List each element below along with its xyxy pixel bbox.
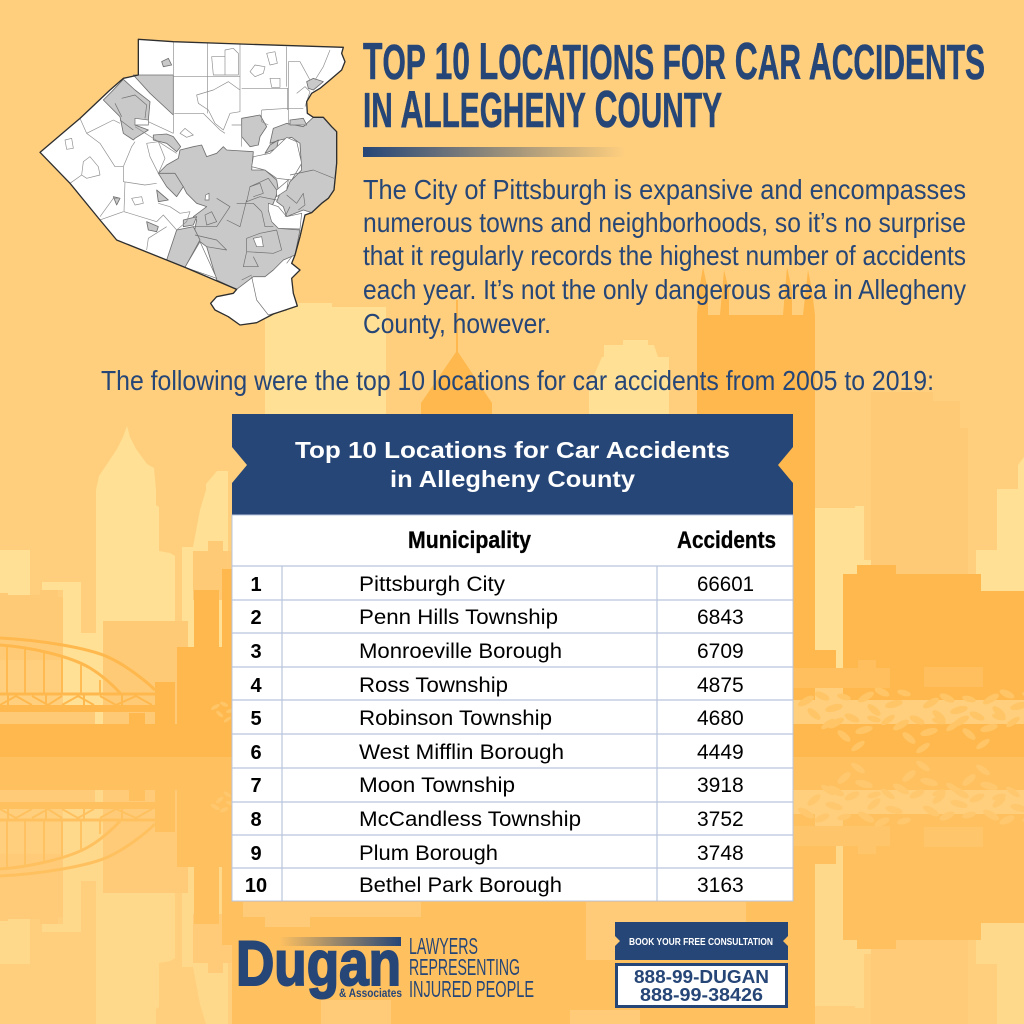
rank column: 10 xyxy=(245,875,267,897)
rank column: 6 xyxy=(250,742,262,764)
call to action banner: BOOK YOUR FREE CONSULTATION xyxy=(629,936,773,948)
accidents column: 3163 xyxy=(697,874,744,897)
rank column: 3 xyxy=(250,641,262,663)
accidents column: 66601 xyxy=(697,573,754,596)
intro paragraph: County, however. xyxy=(363,308,551,339)
table panel xyxy=(232,414,793,901)
municipality column xyxy=(359,573,581,897)
table banner: Top 10 Locations for Car Accidents xyxy=(295,437,730,463)
phone number box: 888-99-DUGAN xyxy=(634,966,769,987)
table body xyxy=(232,515,793,901)
reflection light patches below the table xyxy=(243,902,746,1024)
intro paragraph: numerous towns and neighborhoods, so it’s no surprise xyxy=(363,207,966,238)
municipality column: Robinson Township xyxy=(359,707,552,730)
firm tagline: REPRESENTING xyxy=(409,954,520,980)
title divider gradient bar xyxy=(363,147,625,157)
rank column: 2 xyxy=(250,607,262,629)
intro paragraph xyxy=(363,174,966,339)
skyline reflection in river xyxy=(0,757,1024,1024)
main title xyxy=(363,33,985,139)
accidents column: 3752 xyxy=(697,808,744,831)
table header row xyxy=(408,527,776,554)
bridge xyxy=(0,638,155,708)
municipality column: Bethel Park Borough xyxy=(359,874,562,897)
accidents column: 6709 xyxy=(697,640,744,663)
accidents column: 4680 xyxy=(697,707,744,730)
leaves xyxy=(210,685,1024,755)
table header row: Accidents xyxy=(677,527,776,554)
river bank band xyxy=(0,724,1024,757)
municipality column: Ross Township xyxy=(359,674,508,697)
intro paragraph: each year. It’s not the only dangerous area in Allegheny xyxy=(363,274,966,305)
table banner: in Allegheny County xyxy=(390,466,635,492)
rank column: 9 xyxy=(250,843,262,865)
table header row: Municipality xyxy=(408,527,532,554)
municipality column: Moon Township xyxy=(359,774,515,797)
firm tagline: INJURED PEOPLE xyxy=(409,976,534,1002)
highlighted municipalities xyxy=(103,58,337,289)
municipality column: Monroeville Borough xyxy=(359,640,562,663)
municipality column: McCandless Township xyxy=(359,808,581,831)
accidents column: 6843 xyxy=(697,606,744,629)
rank column: 4 xyxy=(250,675,262,697)
intro paragraph: that it regularly records the highest number of accidents xyxy=(363,240,966,271)
consultation call to action xyxy=(615,922,788,1006)
upper skyline silhouettes xyxy=(96,267,1024,490)
phone number box: 888-99-38426 xyxy=(640,984,763,1005)
firm tagline: LAWYERS xyxy=(409,933,478,959)
accidents column: 4875 xyxy=(697,674,744,697)
municipal boundaries xyxy=(65,42,330,250)
rank column: 7 xyxy=(250,775,262,797)
accidents column: 3748 xyxy=(697,842,744,865)
firm tagline xyxy=(409,933,534,1002)
intro paragraph: The City of Pittsburgh is expansive and encompasses xyxy=(363,174,966,205)
main title: IN ALLEGHENY COUNTY xyxy=(363,81,722,139)
locator map of Allegheny County xyxy=(40,39,345,325)
table lead-in sentence: The following were the top 10 locations for car accidents from 2005 to 2019: xyxy=(101,365,934,396)
white enclaves xyxy=(135,118,302,278)
municipality column: Penn Hills Township xyxy=(359,606,558,629)
boundaries inside highlighted area xyxy=(115,95,334,315)
rank column: 8 xyxy=(250,809,262,831)
call to action banner xyxy=(615,922,788,960)
Dugan logo: Dugan xyxy=(236,929,401,999)
rank column: 1 xyxy=(250,574,262,596)
county border xyxy=(40,39,345,325)
municipality column: Pittsburgh City xyxy=(359,573,506,596)
table banner xyxy=(232,414,793,515)
accidents column xyxy=(697,573,754,897)
municipality column: West Mifflin Borough xyxy=(359,741,564,764)
Dugan logo: & Associates xyxy=(339,988,402,1000)
county outline fill xyxy=(40,39,345,325)
lower skyline and bridge xyxy=(0,490,1024,757)
rank column xyxy=(245,574,267,897)
phone number box xyxy=(616,964,786,1006)
accidents column: 3918 xyxy=(697,774,744,797)
accidents column: 4449 xyxy=(697,741,744,764)
municipality column: Plum Borough xyxy=(359,842,498,865)
rank column: 5 xyxy=(250,708,262,730)
